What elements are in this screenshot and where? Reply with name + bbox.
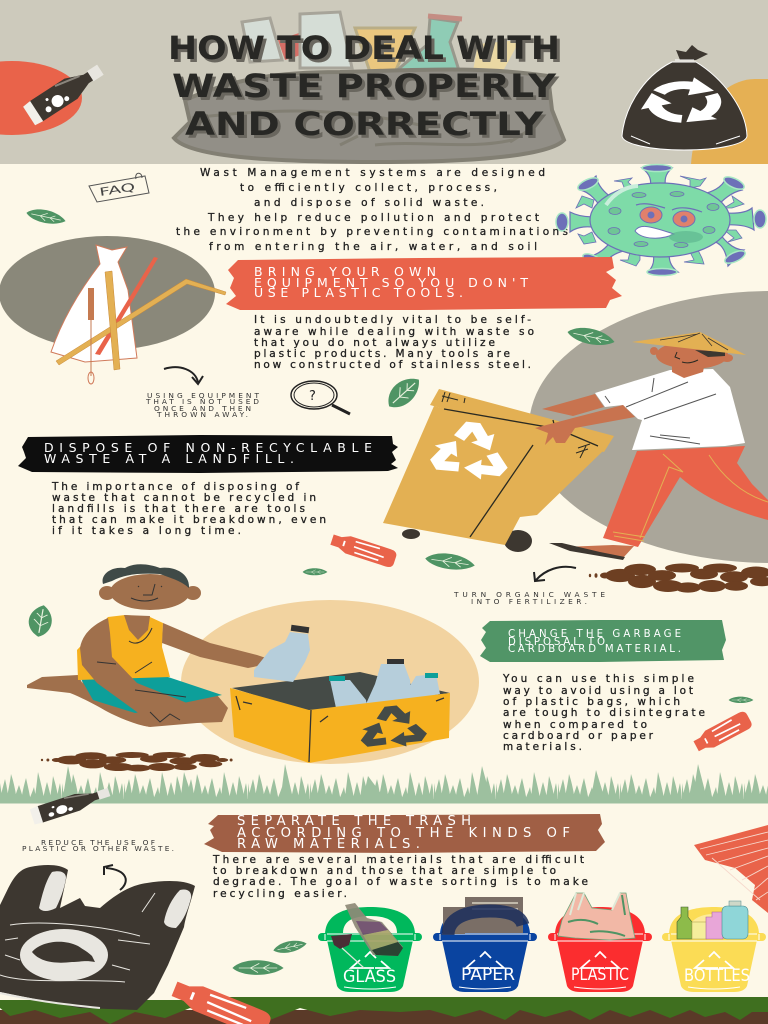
title: WASTE PROPERLY — [172, 67, 557, 105]
caption: using equipment: ONCE AND THEN — [154, 404, 251, 413]
bin: plastic: PLASTIC — [571, 965, 629, 985]
heading: USE PLASTIC TOOLS. — [254, 285, 463, 300]
caption: organic waste: TURN ORGANIC WASTE — [453, 590, 605, 599]
orange circle behind bag — [691, 79, 768, 164]
heading: RAW MATERIALS. — [237, 837, 420, 852]
red bottle on ground — [170, 977, 273, 1024]
white inner dome — [343, 916, 397, 933]
intro text block: the environment by preventing contaminations — [176, 226, 568, 238]
text block: landfill: that can make it breakdown, even — [52, 514, 326, 526]
illustration: red corrugated sheet — [694, 825, 768, 913]
right arm — [162, 623, 278, 668]
panel: dispose of non-recyclable — [18, 435, 398, 473]
gray circle left — [0, 236, 215, 350]
recycle symbol on bin — [421, 417, 517, 487]
illustration: boy sitting — [27, 564, 278, 727]
black brush banner — [18, 435, 398, 473]
wine glass — [331, 934, 364, 968]
documents — [443, 907, 465, 934]
intro text block: Wast Management systems are designed — [200, 167, 545, 179]
caption: using equipment: THAT IS NOT USED — [145, 397, 259, 406]
caption: organic waste — [453, 590, 605, 606]
panel: bring your own equipment — [226, 257, 622, 310]
leaf — [729, 697, 753, 703]
title: AND CORRECTLY — [185, 105, 544, 143]
heading: DISPOSE OF NON-RECYCLABLE — [44, 440, 372, 455]
eyes and mouth — [640, 207, 662, 223]
orange circle behind box — [181, 600, 479, 764]
bin: paper: PAPER — [461, 965, 515, 985]
text block: cardboard — [502, 673, 705, 753]
arrow: curved down — [164, 367, 203, 384]
title: HOW TO DEAL WITH — [171, 32, 563, 70]
leaf — [303, 568, 327, 575]
icon: FAQ tag: FAQ — [98, 180, 137, 199]
text block: self-aware: plastic products. Many tools are — [254, 348, 510, 360]
red circle — [0, 61, 82, 135]
icon: virus — [556, 164, 766, 276]
caption: organic waste: INTO FERTILIZER. — [471, 597, 587, 606]
text block: sorting — [212, 854, 588, 900]
leaf — [232, 960, 284, 975]
plastic bag — [558, 893, 635, 940]
singlet — [77, 615, 170, 680]
text block: cardboard: You can use this simple — [502, 673, 694, 685]
virus body — [590, 183, 730, 257]
text block: sorting: to breakdown and those that are simple to — [213, 865, 556, 877]
text block: self-aware: aware while dealing with waste so — [254, 326, 534, 338]
arrow: curved up — [104, 865, 126, 890]
receptors — [608, 192, 719, 248]
caption: reduce use: REDUCE THE USE OF — [41, 838, 155, 847]
red brush banner — [226, 257, 622, 310]
panel: change the garbage disposal — [480, 620, 726, 662]
heading: WASTE AT A LANDFILL. — [44, 451, 294, 466]
bottles — [677, 907, 692, 939]
arrow: curved left — [534, 567, 576, 581]
brown brush banner — [204, 814, 605, 853]
shirt — [595, 369, 745, 450]
heading: ACCORDING TO THE KINDS OF — [237, 826, 570, 841]
heading: BRING YOUR OWN — [254, 264, 436, 279]
title: HOW TO DEAL WITH — [168, 29, 560, 67]
navy dome overlay — [448, 911, 523, 935]
spike caps — [556, 164, 766, 276]
left arm — [80, 618, 188, 723]
arm front — [535, 405, 635, 445]
leaf — [381, 371, 426, 414]
text block: cardboard: cardboard or paper — [503, 730, 654, 742]
text block: landfill: if it takes a long time. — [52, 525, 241, 537]
text block: self-aware — [254, 314, 534, 371]
text block: sorting: recycling easier. — [213, 888, 347, 900]
heading: DISPOSAL TO — [508, 637, 605, 648]
heading: CHANGE THE GARBAGE — [508, 629, 681, 640]
red bottle — [329, 531, 398, 569]
leaf — [272, 938, 308, 956]
dirt patch right — [589, 564, 768, 593]
caption: using equipment: USING EQUIPMENT — [147, 391, 259, 400]
icon: FAQ tag — [89, 173, 149, 202]
heading: SEPARATE THE TRASH — [237, 814, 471, 829]
text block: landfill: The importance of disposing of — [51, 481, 299, 493]
text block: self-aware: It is undoubtedly vital to be self- — [254, 314, 531, 326]
text block: cardboard: when compared to — [503, 719, 647, 731]
recycle arrows — [631, 77, 735, 129]
leaf — [566, 324, 616, 349]
text block: sorting: There are several materials that are difficult — [212, 854, 584, 866]
header band — [0, 0, 768, 164]
red bottle — [692, 710, 753, 755]
grass strip — [0, 764, 768, 804]
bin: plastic — [548, 893, 652, 992]
icon: dark bottle in header — [23, 60, 107, 126]
recycle symbol on box — [351, 702, 433, 755]
heading: CARDBOARD MATERIAL. — [508, 644, 681, 655]
bin — [383, 389, 614, 552]
icon: magnifying glass — [291, 381, 350, 414]
ground strip — [0, 997, 768, 1024]
gray circle right — [529, 291, 768, 563]
intro text block — [176, 167, 568, 253]
green brush banner — [480, 620, 726, 662]
small spikes — [576, 176, 744, 266]
title: AND CORRECTLY — [188, 108, 547, 146]
text block: landfill: landfills is that there are tools — [52, 503, 305, 515]
intro text block: from entering the air, water, and soil — [209, 241, 537, 253]
foot and sandal — [563, 545, 634, 558]
spikes — [570, 168, 754, 272]
text block: cardboard: are tough to disintegrate — [503, 707, 705, 719]
bin: bottles — [662, 901, 766, 992]
caption: reduce use: PLASTIC OR OTHER WASTE. — [22, 844, 174, 853]
title background: trash pile — [174, 12, 564, 162]
illustration: black plastic bag — [0, 865, 195, 1010]
neck — [124, 615, 150, 640]
dark bottle — [30, 784, 112, 825]
ears, neck and head — [650, 347, 658, 355]
heading — [237, 814, 570, 852]
intro text block: They help reduce pollution and protect — [207, 212, 539, 224]
caption: reduce use — [22, 838, 174, 853]
illustration: cardboard box with bottles — [230, 625, 450, 763]
leaf — [26, 603, 54, 639]
icon: magnifying glass: ? — [309, 389, 316, 404]
panel: separate the trash — [204, 814, 605, 853]
caption: using equipment: THROWN AWAY. — [156, 410, 248, 419]
icon: garbage bag with recycle symbol — [622, 45, 747, 150]
hat — [632, 332, 746, 355]
bottles in box — [330, 680, 367, 708]
text block: cardboard: of plastic bags, which — [503, 696, 680, 708]
bin: glass — [318, 903, 422, 992]
bin: glass: GLASS — [343, 967, 396, 987]
intro text block: and dispose of solid waste. — [254, 197, 484, 209]
text block: self-aware: now constructed of stainless steel. — [254, 359, 531, 371]
illustration: cloth bag with straws and brush — [51, 245, 226, 384]
dirt patch left — [41, 752, 233, 771]
heading — [254, 264, 528, 300]
text block: cardboard: materials. — [503, 741, 582, 753]
heading — [508, 629, 681, 655]
hair — [103, 564, 189, 588]
head — [110, 574, 190, 610]
thigh and knee — [82, 680, 228, 727]
shorts — [81, 676, 222, 713]
title: WASTE PROPERLY — [175, 70, 560, 108]
held bottle — [254, 632, 310, 682]
caption: using equipment — [145, 391, 259, 419]
arm back — [542, 394, 604, 416]
bin: bottles: BOTTLES — [684, 966, 750, 986]
pants — [603, 446, 768, 547]
illustration: man pushing recycling bin — [383, 332, 768, 560]
intro text block: to efficiently collect, process, — [240, 182, 497, 194]
text block: cardboard: way to avoid using a lot — [503, 685, 693, 697]
lower legs and feet — [27, 675, 150, 727]
title — [168, 29, 563, 146]
heading: EQUIPMENT SO YOU DON'T — [254, 275, 528, 290]
text block: landfill — [51, 481, 326, 537]
text block: self-aware: that you do not always utilize — [254, 337, 495, 349]
text block: sorting: degrade. The goal of waste sorting is to make — [213, 876, 588, 888]
leaf — [25, 206, 67, 227]
box front — [230, 688, 450, 763]
heading — [44, 440, 372, 466]
wine bottle — [345, 903, 403, 956]
text block: landfill: waste that cannot be recycled in — [52, 492, 316, 504]
bin: paper — [433, 897, 537, 992]
leaf — [424, 550, 476, 573]
